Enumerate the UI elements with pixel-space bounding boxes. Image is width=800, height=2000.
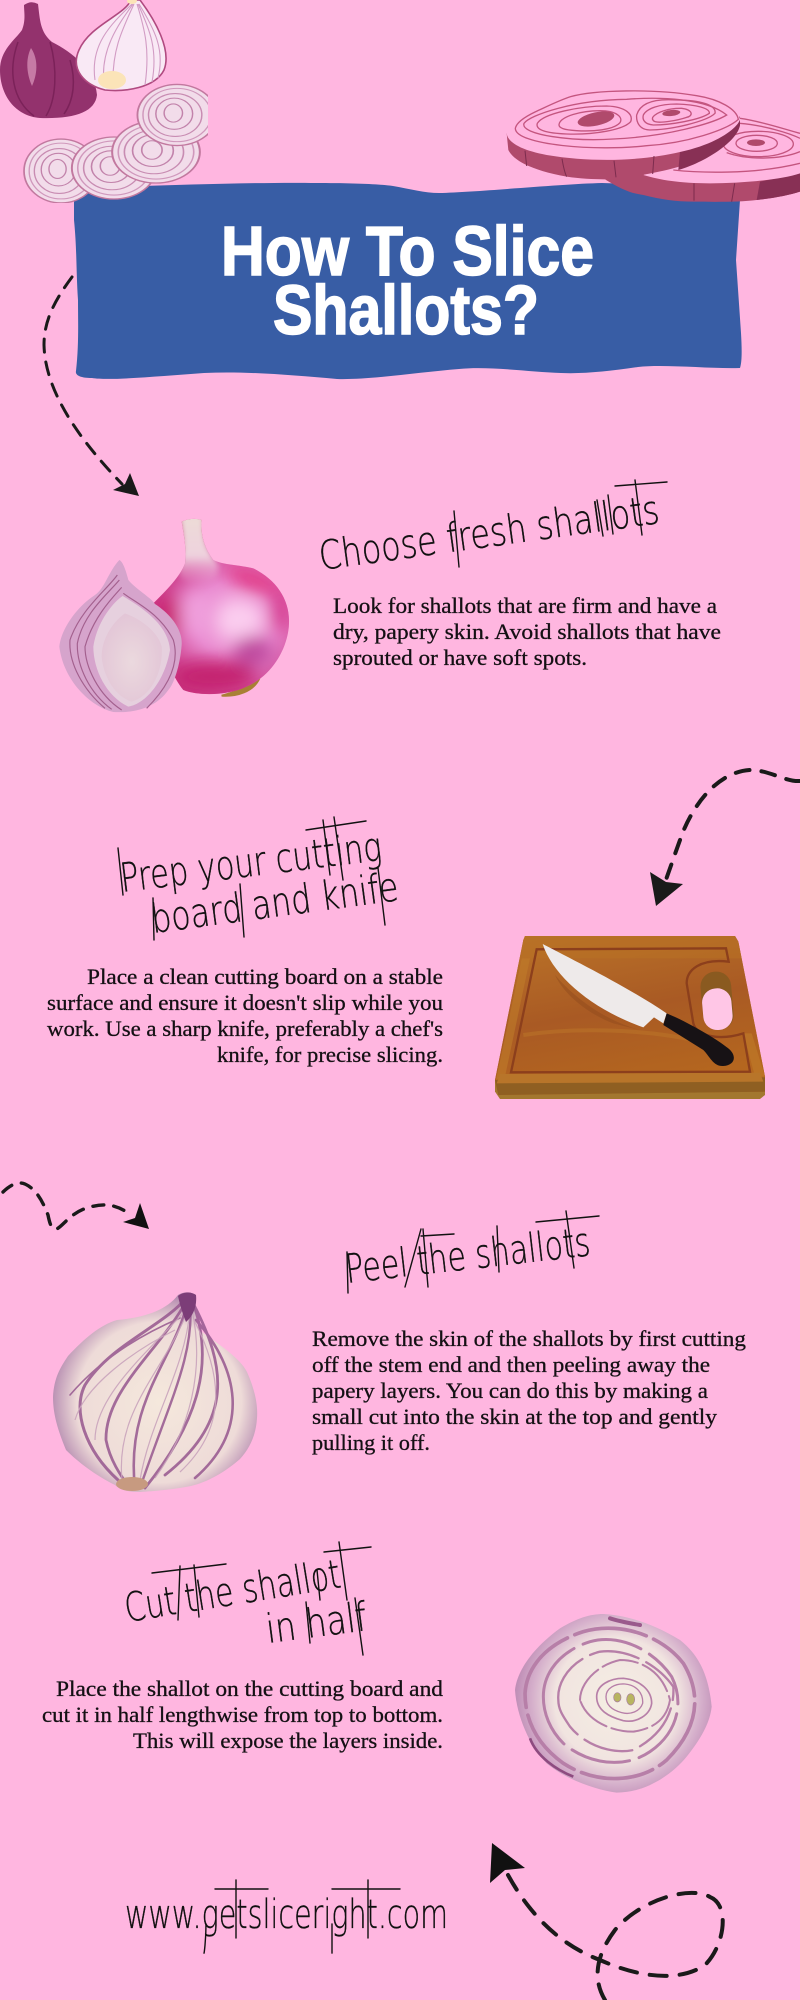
step one text: sprouted or have soft spots. <box>333 645 587 670</box>
step four text: This will expose the layers inside. <box>133 1728 443 1753</box>
step three text <box>312 1326 746 1455</box>
step four text <box>42 1676 443 1753</box>
illustration: back red onion slice, top right <box>605 117 800 202</box>
illustration: front red onion slice, top right <box>507 89 740 179</box>
step four text: cut it in half lengthwise from top to bottom. <box>42 1702 443 1727</box>
step two text <box>47 964 443 1067</box>
step two text: work. Use a sharp knife, preferably a chef's <box>47 1016 443 1041</box>
title <box>221 212 594 349</box>
step two text: Place a clean cutting board on a stable <box>87 964 443 989</box>
step one text: dry, papery skin. Avoid shallots that have <box>333 619 721 644</box>
step one heading: Choose fresh shallots <box>316 487 662 580</box>
step two heading: board and knife <box>148 864 401 943</box>
title banner <box>74 183 742 379</box>
step four heading <box>121 1542 371 1655</box>
illustration: four shallot rings, top left <box>24 84 217 203</box>
step three text: papery layers. You can do this by making a <box>312 1378 708 1403</box>
arrow: to peeling step <box>3 1183 149 1229</box>
step three text: pulling it off. <box>312 1430 430 1455</box>
illustration: peeled shallot <box>53 1292 257 1492</box>
step two heading <box>118 817 401 943</box>
step one text <box>333 593 721 670</box>
illustration: halved shallot, top left <box>76 0 166 90</box>
illustration: shallot cross-section <box>515 1614 712 1793</box>
step three heading: Peel the shallots <box>343 1219 593 1293</box>
step four heading: Cut the shallot <box>121 1552 344 1632</box>
step three text: Remove the skin of the shallots by first cutting <box>312 1326 746 1351</box>
illustration: cutting board and knife <box>495 936 765 1099</box>
website address <box>125 1880 448 1953</box>
step two text: knife, for precise slicing. <box>217 1042 443 1067</box>
step four heading: in half <box>263 1594 369 1653</box>
arrow: looping up toward cross-section <box>490 1843 723 2000</box>
step one: illustration of whole and halved shallot <box>59 510 300 712</box>
step two heading: Prep your cutting <box>118 824 384 902</box>
step four text: Place the shallot on the cutting board and <box>56 1676 443 1701</box>
website address: www.getsliceright.com <box>125 1892 448 1938</box>
title: How To Slice <box>221 212 594 290</box>
title: Shallots? <box>273 271 539 349</box>
step three text: small cut into the skin at the top and gently <box>312 1404 717 1429</box>
step one text: Look for shallots that are firm and have a <box>333 593 717 618</box>
step three text: off the stem end and then peeling away the <box>312 1352 710 1377</box>
step two text: surface and ensure it doesn't slip while you <box>47 990 443 1015</box>
arrow: banner to step one <box>44 277 139 496</box>
illustration: whole red shallot, top left <box>0 2 97 118</box>
arrow: to cutting board <box>650 770 800 906</box>
